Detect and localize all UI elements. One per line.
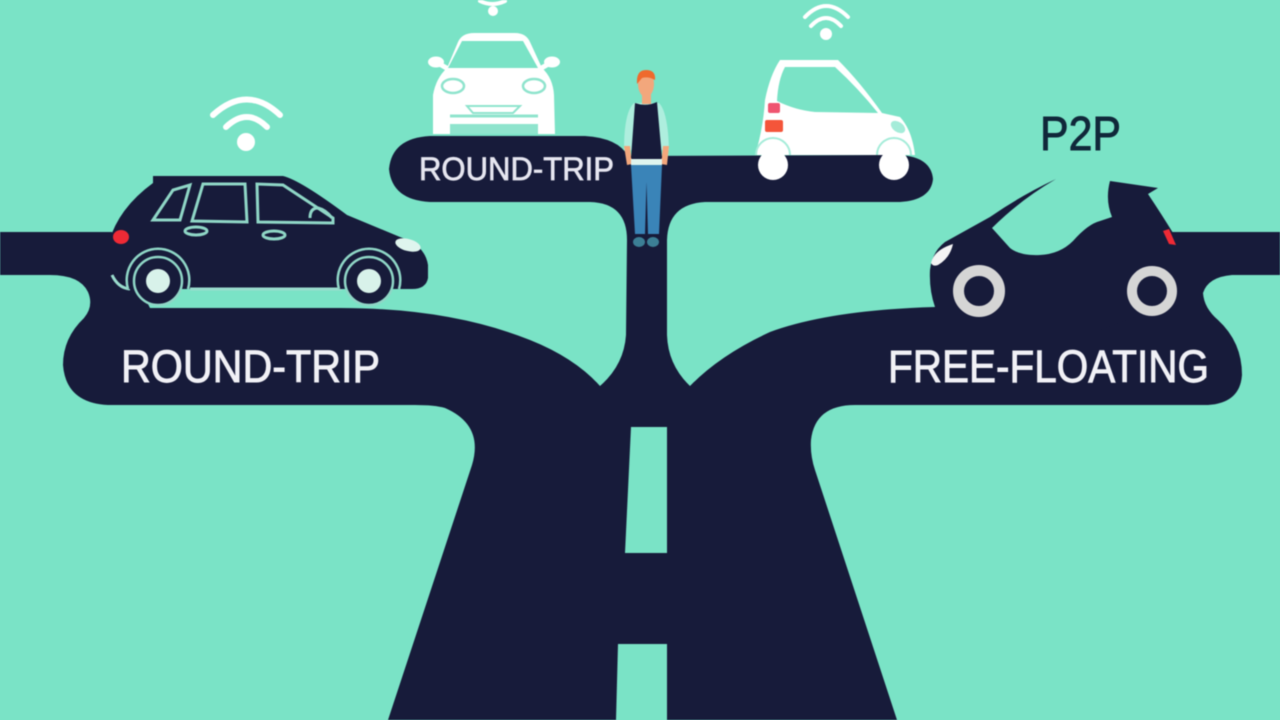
- car body: [755, 60, 915, 155]
- icon: wifi above navy car: [213, 100, 280, 151]
- mirror left: [428, 56, 444, 68]
- head: [638, 71, 654, 97]
- tail light: [1163, 229, 1176, 245]
- car body: [112, 176, 428, 289]
- headlight: [931, 244, 953, 266]
- neck: [642, 92, 651, 104]
- sill line: [190, 288, 342, 290]
- headlights: [442, 79, 464, 93]
- hands: [624, 146, 669, 165]
- front wheel: [338, 249, 400, 305]
- lower rear light: [765, 120, 783, 132]
- windows: [153, 184, 333, 239]
- icon: navy hatchback car: [112, 176, 428, 305]
- icon: navy motorcycle: [930, 179, 1180, 330]
- tail light: [113, 230, 129, 244]
- rear wheel: [1132, 271, 1172, 311]
- waistband: [631, 159, 662, 165]
- upper rear light: [768, 103, 780, 113]
- wheel arches: [756, 138, 911, 155]
- car body: [433, 33, 555, 134]
- arms and shirt: [624, 103, 669, 150]
- windshield: [448, 41, 538, 68]
- icon: wifi above front-view car: [480, 1, 505, 16]
- jeans: [631, 165, 662, 234]
- bike body: [930, 179, 1180, 330]
- icon: person standing: [624, 70, 669, 247]
- icon: white smart car: [755, 60, 915, 180]
- rear wheel: [127, 249, 189, 305]
- lane dash upper: [625, 427, 667, 553]
- mirrors: [436, 62, 552, 70]
- icon: white front-view car: [428, 33, 560, 134]
- front wheel: [958, 270, 1000, 312]
- rear wheel: [758, 150, 788, 180]
- lane dash lower: [616, 644, 667, 720]
- hair: [637, 70, 655, 84]
- headlight: [394, 236, 422, 254]
- grille: [467, 106, 520, 113]
- label: round-trip upper branch: ROUND-TRIP: [419, 151, 614, 187]
- front wheel: [879, 150, 909, 180]
- rear bumper hook: [112, 275, 130, 289]
- label: free-floating: FREE-FLOATING: [888, 341, 1209, 392]
- label: round-trip left branch: ROUND-TRIP: [121, 341, 380, 392]
- label: P2P: P2P: [1040, 108, 1121, 161]
- icon: wifi above smart car: [805, 6, 848, 40]
- shoes: [633, 237, 645, 247]
- lower opening: [450, 124, 538, 134]
- headlight: [889, 118, 907, 136]
- side window: [777, 67, 878, 113]
- vest: [631, 102, 662, 158]
- bumper line: [450, 114, 538, 118]
- mirror right: [544, 56, 560, 68]
